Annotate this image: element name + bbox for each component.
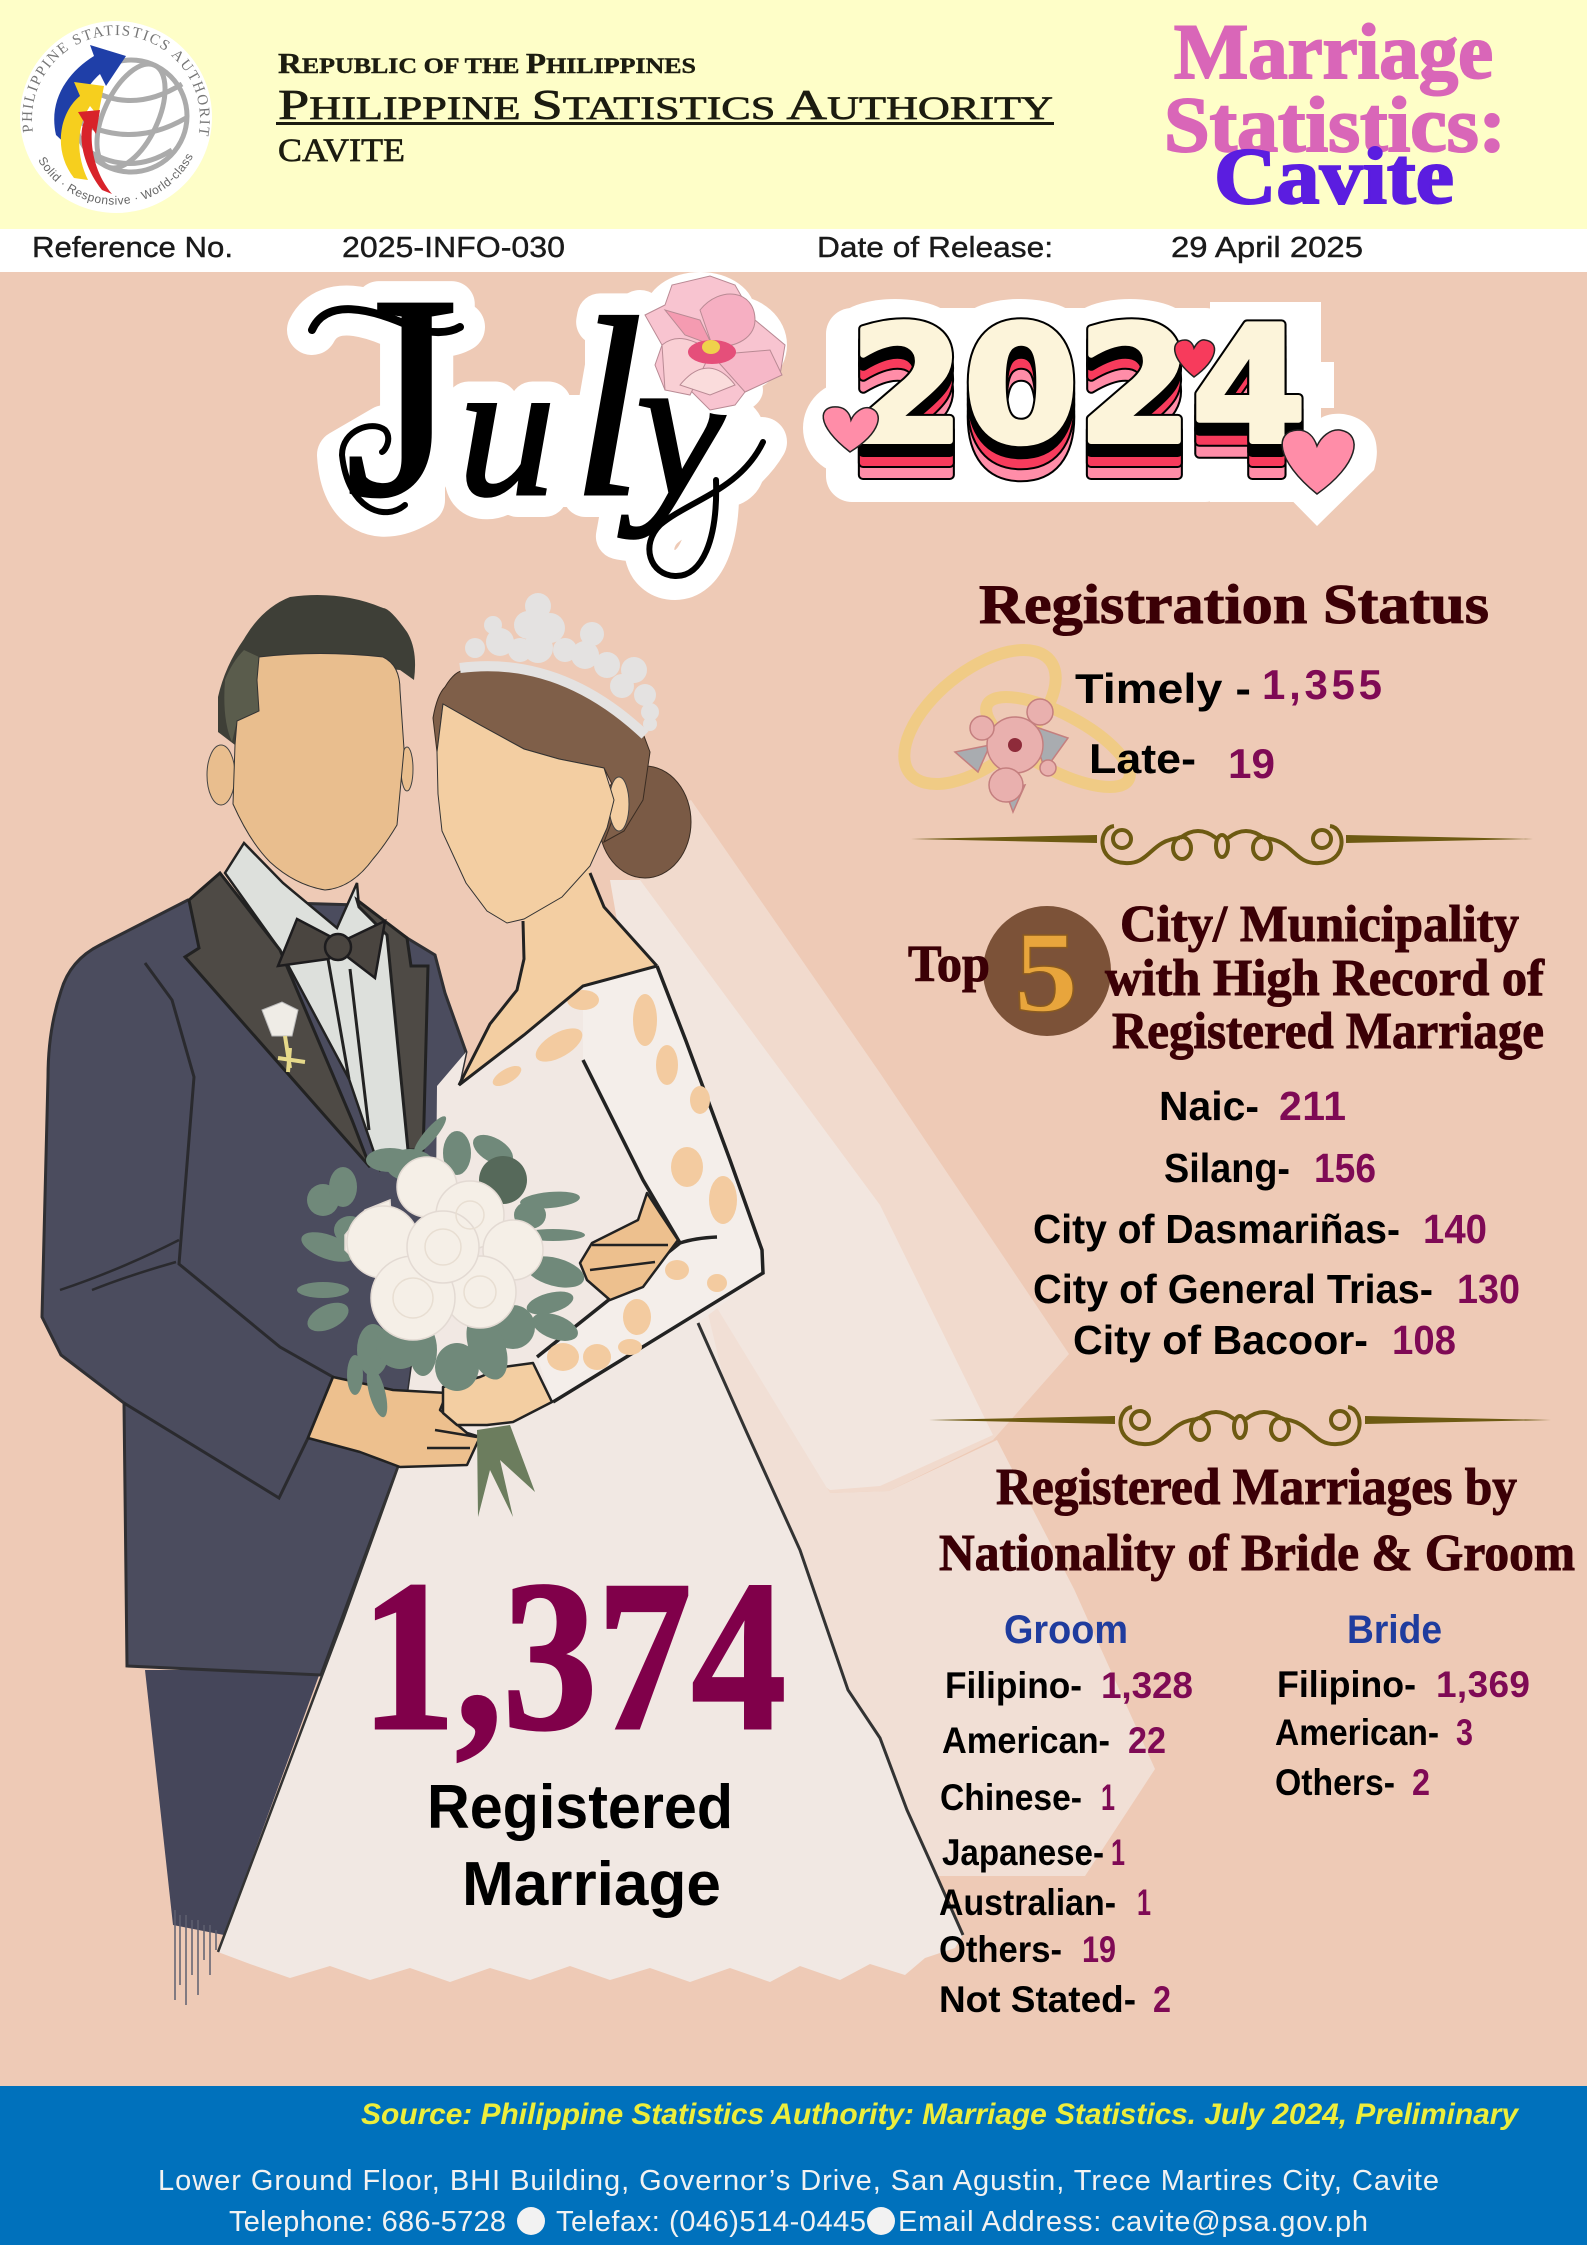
lettering: J — [345, 236, 458, 557]
ranking list: Silang- — [1164, 1145, 1290, 1191]
groom list: 19 — [1082, 1929, 1116, 1970]
groom list: Australian- — [939, 1882, 1116, 1923]
icon: hearts — [823, 340, 1354, 494]
lettering: u — [458, 321, 556, 537]
contact line: Telephone: 686-5728 — [229, 2206, 506, 2238]
panel: top 5 municipalities — [908, 896, 1545, 1363]
ornamental divider 1 — [911, 826, 1533, 863]
bride list: 1,369 — [1436, 1664, 1530, 1705]
icon: PSA logo: Solid · Responsive · World-class — [39, 154, 192, 205]
heading — [939, 1459, 1575, 1582]
source line: Source: Philippine Statistics Authority: Marriage Statistics. July 2024, Preliminary — [361, 2098, 1519, 2131]
main figure: 1,374 Registered Marriage — [361, 1536, 786, 1919]
contact line: Email Address: cavite@psa.gov.ph — [898, 2206, 1368, 2238]
bride list: 2 — [1412, 1762, 1430, 1803]
stacked numerals: 2024 — [850, 292, 1306, 479]
agency name: PHILIPPINE STATISTICS A UTHORITY — [278, 83, 1053, 129]
groom list: Chinese- — [940, 1777, 1082, 1818]
bride list: Others- — [1275, 1762, 1395, 1803]
ranking list: City of Bacoor- — [1073, 1317, 1368, 1363]
bride dress — [218, 966, 963, 1982]
agency name — [276, 49, 1054, 169]
ranking list: 140 — [1423, 1206, 1487, 1252]
icon: tiara — [460, 593, 659, 735]
bride head — [433, 664, 691, 1085]
reference band — [0, 229, 1587, 272]
title: Marriage Statistics Cavite: Marriage — [1174, 8, 1493, 95]
bride list: Bride — [1347, 1608, 1442, 1652]
groom list: Japanese- — [942, 1832, 1104, 1873]
groom suit — [42, 843, 466, 1675]
stacked numerals: 2024 — [850, 303, 1306, 490]
ranking list — [1033, 1083, 1520, 1363]
title: Marriage Statistics Cavite — [1164, 8, 1506, 221]
ornamental divider 2 — [929, 1407, 1551, 1444]
groom list: 1 — [1101, 1777, 1115, 1818]
bride list — [1275, 1608, 1530, 1803]
illustration: bride and groom — [42, 593, 1155, 2005]
sticker halo: l — [572, 267, 643, 550]
lettering: y — [618, 312, 728, 539]
heading: July sticker — [312, 236, 765, 576]
heading lines — [1105, 896, 1545, 1060]
agency name: REPUBLIC OF THE PHILIPPINES — [278, 49, 696, 80]
ranking list: 130 — [1457, 1266, 1520, 1312]
bouquet — [297, 1113, 588, 1517]
veil — [610, 800, 1155, 1900]
ranking list: 108 — [1392, 1317, 1456, 1363]
lace pattern — [490, 990, 737, 1371]
heading lines: Registered Marriage — [1112, 1003, 1544, 1060]
sticker halo: y — [618, 312, 728, 539]
reference band: 29 April 2025 — [1171, 232, 1363, 264]
groom list: 2 — [1153, 1979, 1171, 2020]
sticker halo: J — [345, 236, 458, 557]
groom list: Not Stated- — [939, 1979, 1136, 2020]
bride list: American- — [1275, 1712, 1439, 1753]
stacked numerals: 2024 — [850, 326, 1306, 513]
panel: nationality of bride and groom — [939, 1459, 1575, 2020]
groom list: 1 — [1111, 1832, 1125, 1873]
sticker halo — [803, 299, 1377, 526]
heading lines: City/ Municipality — [1120, 896, 1519, 953]
panel: registration status — [881, 574, 1489, 812]
ranking list: Naic- — [1159, 1083, 1259, 1129]
address line: Lower Ground Floor, BHI Building, Governor’s Drive, San Agustin, Trece Martires City, Cavite — [158, 2165, 1439, 2197]
contact line — [229, 2206, 1368, 2238]
main figure: 1,374 Registered Marriage: Marriage — [462, 1850, 721, 1919]
calligraphic flourishes — [312, 309, 763, 576]
icon: pink flower — [645, 272, 787, 415]
footer — [0, 2086, 1587, 2245]
ranking list: City of General Trias- — [1033, 1266, 1433, 1312]
main figure: 1,374 Registered Marriage: Registered — [427, 1773, 733, 1842]
groom head — [207, 595, 415, 890]
ranking list: 211 — [1279, 1083, 1346, 1129]
lettering: l — [572, 267, 643, 550]
late: Late- — [1089, 735, 1196, 782]
groom list: 1 — [1137, 1882, 1151, 1923]
heading: Registration Status — [979, 574, 1489, 636]
arms and hands — [308, 1193, 678, 1467]
timely: Timely - — [1075, 665, 1251, 712]
icon: wedding rings — [881, 625, 1142, 812]
agency name: CAVITE — [278, 133, 405, 169]
heading: Top: Top — [908, 936, 990, 993]
groom list: 22 — [1128, 1720, 1166, 1761]
reference band: 2025-INFO-030 — [342, 232, 565, 264]
groom trousers — [145, 1670, 321, 2005]
groom hand on bouquet — [308, 1377, 480, 1467]
groom list: Filipino- — [945, 1665, 1082, 1706]
panel: registration status: 19 — [1228, 740, 1275, 787]
stacked numerals: 2024 — [850, 292, 1306, 479]
groom list: 1,328 — [1101, 1665, 1193, 1706]
reference band: Reference No. — [32, 232, 233, 264]
heading: 2024 sticker — [803, 292, 1377, 526]
header banner — [0, 0, 1587, 229]
ranking list: 156 — [1314, 1145, 1376, 1191]
groom hand on waist — [580, 1193, 678, 1300]
stacked numerals: 2024 — [850, 314, 1306, 501]
icon: number 5 badge: 5 — [1014, 909, 1078, 1037]
icon: PSA logo — [20, 21, 212, 213]
stacked numerals: 2024 — [850, 326, 1306, 513]
groom list: American- — [942, 1720, 1110, 1761]
reference band: Date of Release: — [817, 232, 1053, 264]
title: Marriage Statistics Cavite: Cavite — [1214, 133, 1454, 221]
icon: boutonniere — [262, 1002, 305, 1072]
bride hand — [443, 1363, 552, 1425]
ranking list: City of Dasmariñas- — [1033, 1206, 1400, 1252]
heading lines: with High Record of — [1105, 950, 1545, 1007]
sticker halo — [312, 236, 765, 575]
title: Marriage Statistics Cavite: Statistics: — [1164, 81, 1506, 168]
groom list: Others- — [939, 1929, 1062, 1970]
icon: number 5 badge — [983, 906, 1111, 1037]
bride list: Filipino- — [1277, 1664, 1416, 1705]
sticker halo: u — [458, 321, 556, 537]
groom list: Groom — [1004, 1608, 1128, 1652]
panel: registration status: 1,355 — [1262, 661, 1382, 708]
contact line: Telefax: (046)514-0445 — [556, 2206, 866, 2238]
heading: Registered Marriages by — [996, 1459, 1517, 1516]
bride list: 3 — [1456, 1712, 1473, 1753]
main figure: 1,374 Registered Marriage: 1,374 — [361, 1536, 786, 1775]
icon: bow tie — [278, 919, 385, 978]
stacked numerals: 2024 — [850, 314, 1306, 501]
groom list — [939, 1608, 1193, 2020]
